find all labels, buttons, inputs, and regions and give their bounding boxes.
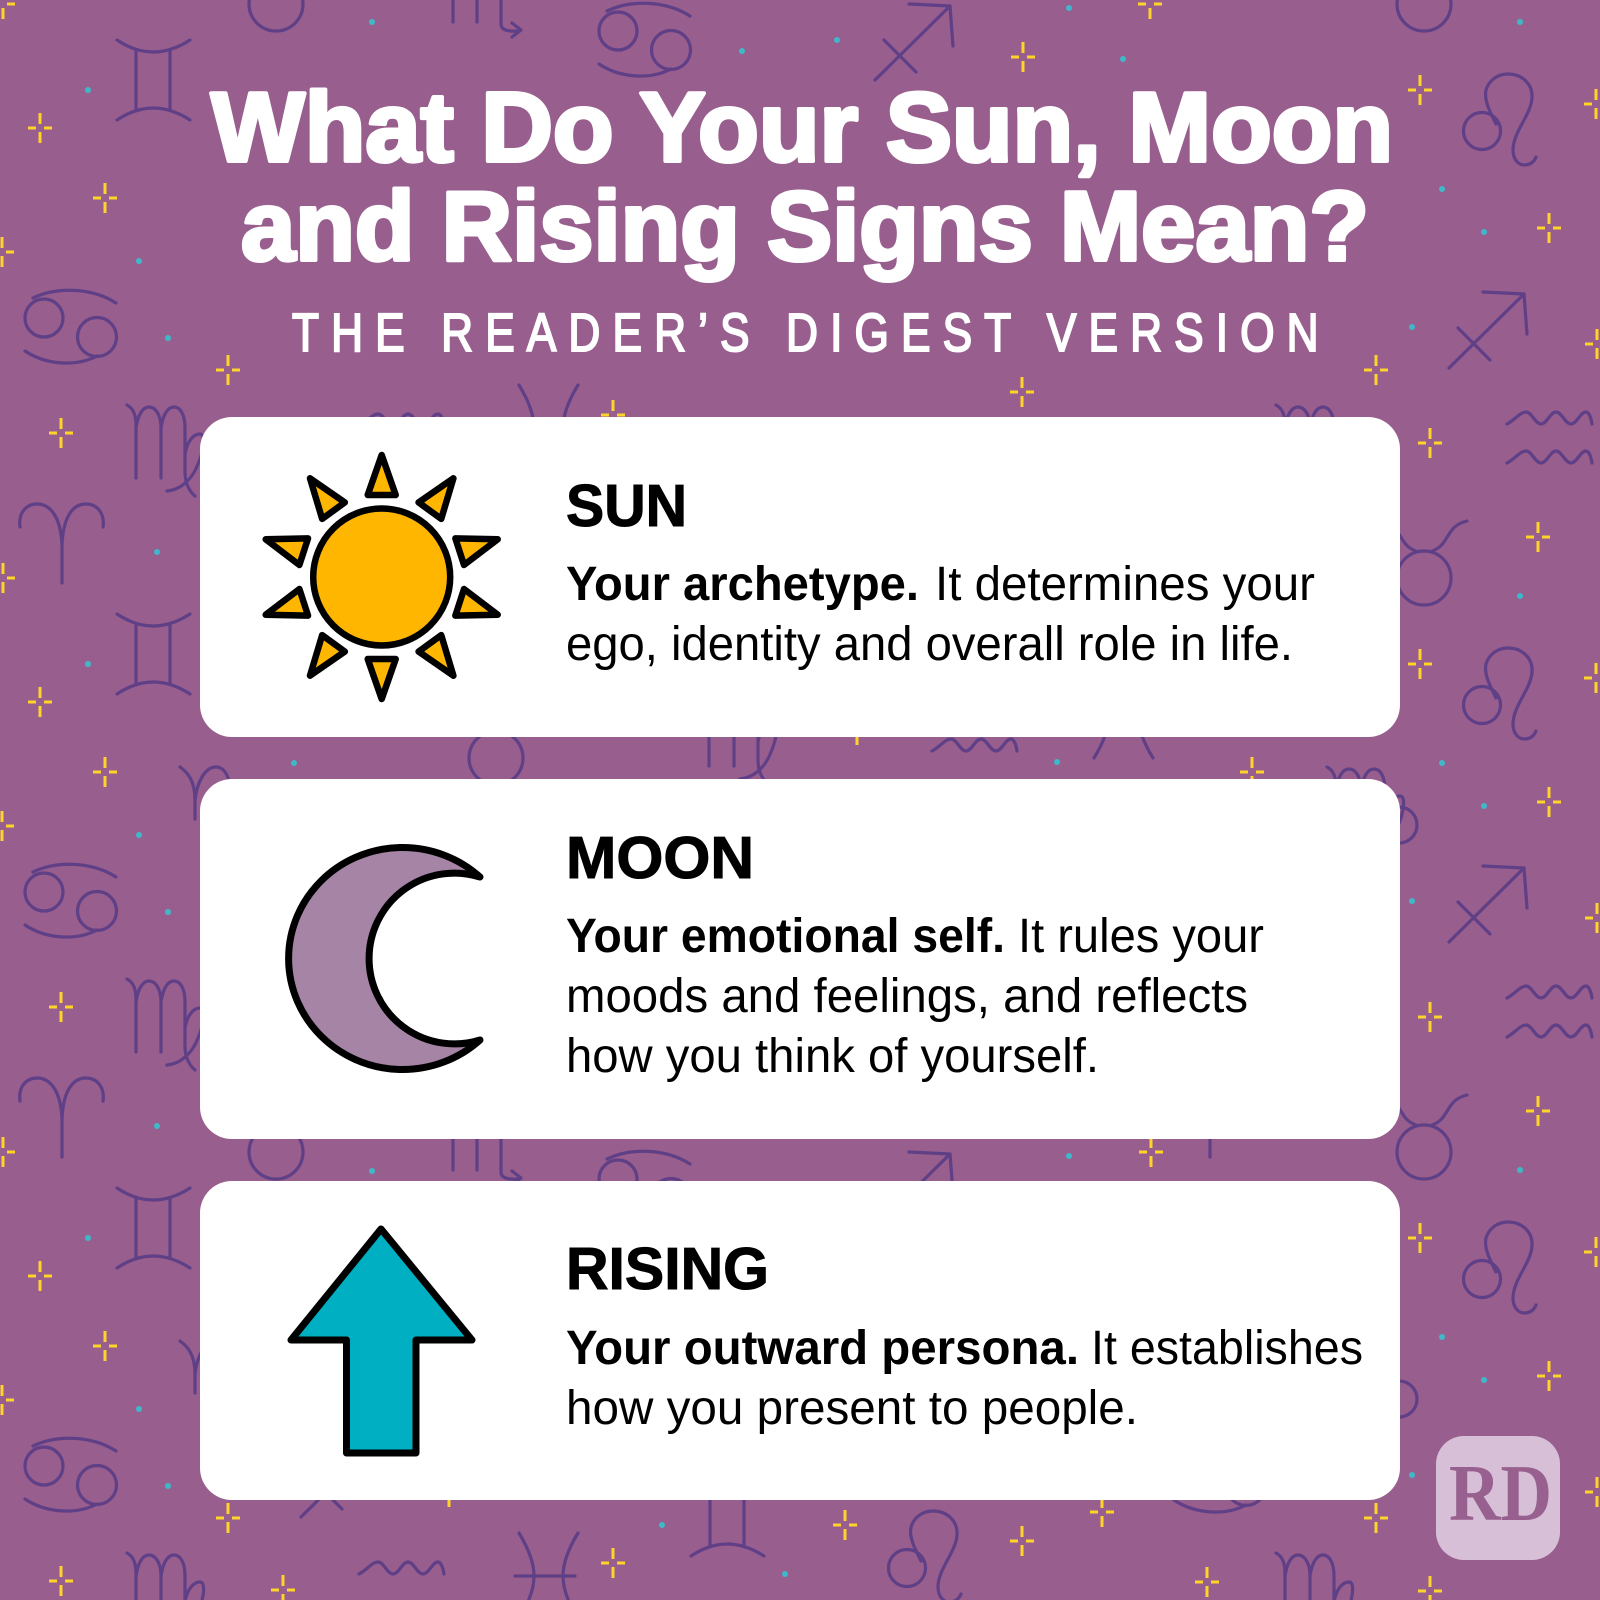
moon description: how you think of yourself. [566,1030,1099,1083]
sun description: It determines your [935,558,1315,611]
title [211,72,1393,281]
moon description: It rules your [1018,910,1264,963]
logo: RD [1436,1436,1560,1560]
sun description [566,558,1315,671]
rising description: Your outward persona. [566,1322,1079,1375]
moon description: Your emotional self. [566,910,1005,963]
rising description [566,1322,1363,1435]
sun description: Your archetype. [566,558,919,611]
title: and Rising Signs Mean? [241,171,1369,281]
title: What Do Your Sun, Moon [211,72,1393,182]
icon: rising arrow [291,1229,472,1453]
rising description: how you present to people. [566,1382,1138,1435]
sun description: ego, identity and overall role in life. [566,618,1293,671]
rising heading: RISING [566,1236,769,1302]
moon heading: MOON [566,825,754,891]
icon: moon [289,848,480,1070]
icon: sun [261,455,502,699]
sun heading: SUN [566,473,687,539]
panel: moon [200,779,1400,1139]
panel: sun [200,417,1400,737]
panel: rising [200,1181,1400,1500]
rising description: It establishes [1091,1322,1363,1375]
moon description: moods and feelings, and reflects [566,970,1248,1023]
logo: RD: RD [1449,1450,1552,1538]
moon description [566,910,1264,1083]
subtitle: THE READER’S DIGEST VERSION [292,303,1319,363]
